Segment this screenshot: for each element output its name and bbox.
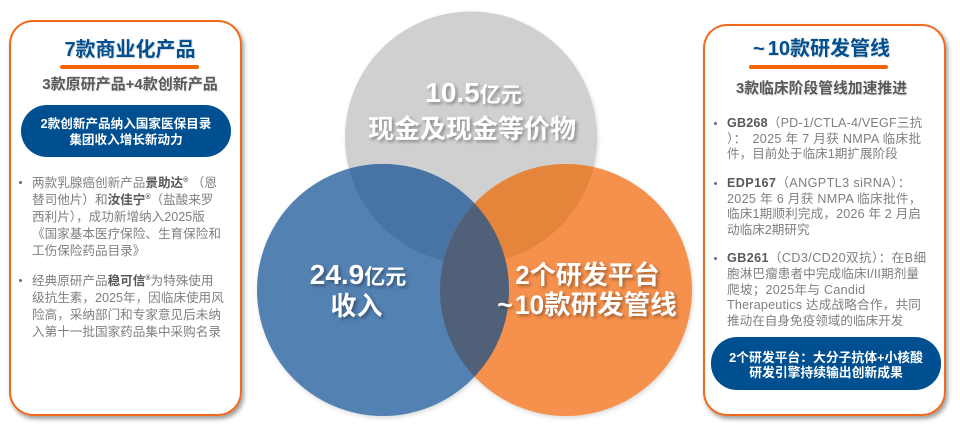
callout: R&D platforms	[711, 337, 941, 390]
bullet text: classic product: 险高，采纳部门和专家意见后未纳	[32, 308, 221, 322]
circle label: platforms and pipeline: ~10款研发管线	[497, 290, 677, 320]
bullet text: GB268	[714, 116, 922, 161]
bullet text: EDP167: 动临床2期研究	[727, 223, 810, 237]
heading underline	[60, 65, 199, 69]
bullet text: GB261: 胞淋巴瘤患者中完成临床I/II期剂量	[727, 267, 919, 281]
bullet text: new products: 《国家基本医疗保险、生育保险和	[32, 227, 221, 241]
bullet text: classic product: 入第十一批国家药品集中采购名录	[32, 325, 221, 339]
circle label: cash	[368, 77, 579, 144]
circle: pipeline	[440, 164, 692, 416]
callout: R&D platforms: 研发引擎持续输出创新成果	[749, 365, 903, 380]
bullet text: GB268: 件，目前处于临床1期扩展阶段	[727, 147, 898, 161]
circle label: platforms and pipeline: 2个研发平台	[515, 260, 660, 290]
bullet text: GB261: 爬坡；2025年与 Candid	[727, 283, 865, 297]
bullet text: GB268: ）： 2025 年 7 月获 NMPA 临床批	[727, 132, 921, 146]
bullet text: new products: 工伤保险药品目录》	[32, 244, 145, 258]
bullet text: GB268: GB268（PD-1/CTLA-4/VEGF三抗	[727, 116, 922, 130]
callout: insurance listing	[21, 105, 231, 157]
circle label: revenue: 24.9亿元	[310, 259, 406, 290]
panel: commercial products	[9, 20, 242, 416]
bullet text: EDP167: 临床1期顺利完成，2026 年 2 月启	[727, 207, 921, 221]
callout: insurance listing: 集团收入增长新动力	[69, 133, 183, 147]
heading: 7 commercial products: 7款商业化产品	[64, 39, 196, 61]
circle shadows	[258, 14, 693, 418]
bullet text: new products	[19, 176, 221, 258]
venn diagram circles	[256, 12, 694, 420]
overlap: revenue and pipeline	[440, 204, 509, 376]
subheading: 3款原研产品+4款创新产品	[42, 76, 218, 93]
circle label: revenue	[310, 259, 409, 321]
circle label: cash: 现金及现金等价物	[368, 114, 576, 144]
heading: about 10 pipeline candidates: ~10款研发管线	[753, 38, 890, 60]
overlap: cash and pipeline	[444, 164, 594, 260]
panel: pipeline	[703, 24, 946, 416]
circle: revenue	[257, 164, 509, 416]
bullet text: new products: 替司他片）和汝佳宁®（盐酸来罗	[32, 193, 213, 207]
bullet text: new products: 两款乳腺癌创新产品景助达® （恩	[32, 176, 217, 190]
bullet text: new products: 西利片），成功新增纳入2025版	[32, 210, 205, 224]
bullet text: EDP167: EDP167（ANGPTL3 siRNA）：	[727, 176, 911, 190]
circle: cash	[345, 12, 597, 264]
callout: R&D platforms: 2个研发平台：大分子抗体+小核酸	[729, 350, 923, 365]
circle label: revenue: 收入	[330, 291, 382, 321]
bullet text: GB261: Therapeutics 达成战略合作，共同	[727, 298, 921, 312]
bullet text: classic product: 经典原研产品稳可信®为特殊使用	[32, 274, 213, 288]
bullet text: GB261: 推动在自身免疫领域的临床开发	[727, 314, 903, 328]
circle label: cash: 10.5亿元	[425, 77, 522, 108]
heading underline	[749, 65, 888, 69]
circle label: platforms and pipeline	[497, 260, 680, 320]
bullet text: EDP167	[714, 176, 922, 237]
bullet text: GB261: GB261（CD3/CD20双抗）：在B细	[727, 251, 926, 265]
bullet text: classic product: 级抗生素，2025年，因临床使用风	[32, 291, 224, 305]
bullet text: classic product	[19, 274, 224, 339]
subheading: 3款临床阶段管线加速推进	[736, 81, 907, 97]
bullet text: GB261	[714, 251, 926, 328]
bullet text: EDP167: 2025 年 6 月获 NMPA 临床批件，	[727, 192, 922, 206]
overlap: cash and revenue	[349, 164, 474, 260]
callout: insurance listing: 2款创新产品纳入国家医保目录	[41, 117, 211, 131]
